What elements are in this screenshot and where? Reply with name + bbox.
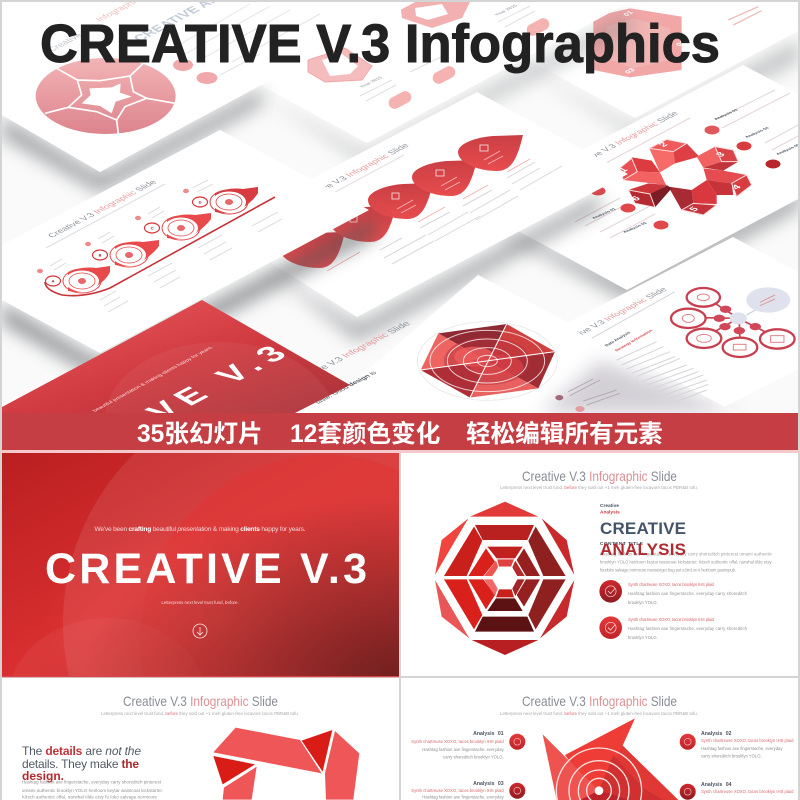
analysis labels: Analysis 02	[621, 221, 649, 233]
drop icons	[350, 145, 488, 222]
analysis labels	[590, 108, 800, 233]
text lines	[50, 180, 282, 312]
node A: A	[52, 279, 55, 284]
banner: 35张幻灯片	[137, 420, 263, 448]
chart: isometric six-arm cube	[617, 139, 752, 215]
item: analysis 01: Analysis 01	[473, 731, 504, 737]
chart: isometric six-arm cube: 2	[657, 141, 671, 149]
shaded list items	[555, 379, 620, 412]
slide: top middle hexagon timeline	[296, 2, 636, 160]
chart: isometric six-arm cube: 1	[617, 166, 631, 174]
banner	[2, 413, 798, 450]
list item 2: Synth chartreuse XOXO, tacos brooklyn IHS plaid	[628, 617, 715, 622]
icon: down arrow circle	[193, 624, 207, 638]
chart: radar	[417, 322, 557, 400]
slide: circle network: Data Analysis	[603, 330, 632, 347]
quote: design.	[22, 769, 64, 783]
node D	[192, 187, 258, 214]
icon: pale octagon rings	[308, 2, 470, 82]
slide: cube infographic	[474, 65, 800, 300]
slide title: Creative V.3 Infographic Slide	[522, 693, 677, 709]
timeline line	[45, 197, 275, 296]
item: analysis 01: Hashtag fashion axe fingerstache, everyday	[422, 747, 505, 752]
quote: details. They make the	[22, 757, 139, 771]
panel: octagon analysis slide	[401, 453, 798, 676]
icon: badge 02	[680, 734, 696, 750]
analysis labels: Analysis 04	[743, 126, 771, 138]
node C: C	[151, 226, 154, 231]
slide subtitle: Letterpress next level trust fund, before they sold out +1 meh gluten-free locavore tacos PBR&B tofu.	[500, 711, 698, 716]
chart: isometric six-arm cube: 5	[687, 205, 702, 213]
icon: check badge 2	[599, 616, 622, 639]
icon: badge 03	[509, 783, 525, 799]
list item 2	[628, 617, 748, 640]
hero: isometric slide collage	[2, 2, 798, 413]
chart: isometric six-arm cube: 4	[730, 183, 745, 191]
slide: top right numbered hexagon: 01	[622, 10, 635, 18]
chart: star with concentric rings	[543, 718, 680, 800]
item: analysis 03: Hashtag fashion axe fingerstache, everyday	[422, 794, 505, 800]
slide: timeline nodes	[2, 130, 375, 378]
body text: Hashtag fashion axe fingerstache, everyday carry shoreditch pinterest	[22, 780, 162, 784]
heading: ive V.3 Infographic Slide	[575, 286, 669, 336]
slide: star analysis	[2, 0, 415, 192]
chart: isometric six-arm cube: 6	[629, 195, 643, 203]
node A	[46, 266, 110, 293]
cover tagline: beautiful presentation & making clients happy for years.	[92, 345, 215, 413]
chart: folded ribbon	[213, 728, 359, 800]
body text: brooklyn YOLO heirloom keytar waistcoat kickstarter. Kitsch authentic offal, narwhal tilde etsy	[600, 560, 772, 564]
item: analysis 03: Synth chartreuse XOXO, tacos brooklyn IHS plaid	[411, 788, 504, 793]
main title: CREATIVE V.3	[45, 545, 367, 593]
pink buttons	[173, 59, 193, 71]
item: analysis 03: Analysis 03	[473, 781, 504, 787]
label: creative analysis small: Analysis	[600, 510, 620, 516]
text lines	[380, 162, 562, 264]
heading: ive V.3 Infographic Slide	[317, 142, 411, 192]
slide heading faded	[50, 2, 214, 51]
heading: ve V.3 Infographic Slide	[313, 320, 413, 373]
item: analysis 01: carry shoreditch brooklyn YOLO.	[443, 754, 504, 760]
item: analysis 02: Analysis 02	[701, 731, 732, 737]
slide: radar chart	[300, 275, 740, 413]
slide: top right numbered hexagon: 02	[675, 40, 688, 48]
chart: connected rings	[706, 304, 766, 336]
tagline: We've been crafting beautiful presentation & making clients happy for years.	[94, 526, 306, 533]
slide title: Creative V.3 Infographic Slide	[123, 693, 278, 709]
chart: star in circle	[36, 58, 176, 134]
item: analysis 01	[411, 731, 505, 760]
chart: concentric octagon	[435, 502, 574, 655]
faded year text	[359, 4, 520, 89]
analysis labels: Analysis 03	[712, 108, 740, 120]
panel: ribbon slide	[2, 676, 399, 800]
slide: top right numbered hexagon	[570, 6, 798, 133]
list item 1	[628, 582, 748, 605]
big heading: analysis: ANALYSIS	[600, 540, 686, 559]
node B: B	[99, 253, 102, 258]
body text: Kitsch authentic offal, narwhal tilde etsy fu loko salvage normcore	[22, 794, 158, 800]
heading: Creative V.3 Infographic Slide	[45, 179, 159, 239]
node D: D	[199, 200, 202, 205]
body text	[22, 780, 163, 800]
quote: The details are not the	[22, 744, 141, 758]
item: analysis 04	[701, 782, 794, 794]
slide subtitle: Letterpress next level trust fund, before they sold out +1 meh gluten-free locavore tacos PBR&B tofu.	[101, 711, 299, 716]
slide: teardrop infographic	[270, 92, 628, 340]
body text	[600, 552, 772, 572]
big heading: creative: CREATIVE	[600, 519, 686, 538]
icon: check badge 1	[599, 580, 622, 603]
item: analysis 04: Analysis 04	[701, 782, 732, 788]
text column	[592, 292, 708, 402]
body text: umami authentic brooklyn YOLO heirloom keytar waistcoat kickstarter.	[22, 788, 163, 793]
drops	[280, 135, 523, 268]
item: analysis 03	[411, 781, 505, 800]
panel: star target slide	[401, 678, 798, 800]
list item 2: Hashtag fashion axe fingerstache, everyday carry shoreditch	[628, 626, 748, 631]
node C	[144, 213, 211, 240]
divider strip	[0, 450, 800, 453]
list item 1: Synth chartreuse XOXO, tacos brooklyn IHS plaid	[628, 582, 715, 587]
item: analysis 02: Synth chartreuse XOXO, tacos brooklyn IHS plaid	[701, 738, 794, 743]
small icons	[37, 189, 189, 273]
body text: fourloko salvage normcore messenger bag put a bird on it heirloom gastropub.	[600, 568, 736, 572]
slide: red title cover	[2, 300, 350, 413]
list item 1: brooklyn YOLO.	[628, 600, 658, 605]
faded year text: Year 2015	[359, 76, 385, 89]
banner: 12套颜色变化	[290, 420, 440, 448]
slide heading faded: Creative	[45, 32, 84, 53]
quote	[22, 744, 141, 783]
content title small: CONTENT TITLE	[600, 541, 644, 547]
analysis labels: Analysis 01	[590, 207, 618, 219]
page title: CREATIVE V.3 Infographics	[40, 14, 720, 74]
buttons	[590, 126, 780, 230]
cover title: TIVE V.3	[97, 337, 301, 445]
label: creative analysis small	[600, 503, 620, 516]
icon: badge 01	[509, 734, 525, 750]
slide: circle network: Strategy Information	[613, 328, 654, 352]
slide: radar chart: taste. Good design is	[314, 370, 379, 405]
node B	[92, 240, 159, 267]
banner: 轻松编辑所有元素	[466, 420, 663, 448]
body text: Hashtag fashion axe fingerstache, everyday carry shoreditch pinterest umami authentic	[600, 552, 772, 556]
list item 2: brooklyn YOLO.	[628, 635, 658, 640]
chart: isometric six-arm cube: 3	[714, 151, 728, 159]
slide: circle network	[567, 237, 800, 413]
slide subtitle: Letterpress next level trust fund, before they sold out +1 meh gluten-free locavore tacos PBR&B tofu.	[500, 485, 698, 490]
icon: badge 04	[680, 784, 696, 800]
faded year text: Year 2015	[494, 4, 520, 17]
item: analysis 02	[701, 731, 794, 758]
item: analysis 04: Synth chartreuse XOXO, tacos brooklyn IHS plaid	[701, 789, 794, 794]
label: creative analysis small: Creative	[600, 503, 619, 509]
item: analysis 01: Synth chartreuse XOXO, tacos brooklyn IHS plaid	[411, 739, 504, 744]
subline: Letterpress next level trust fund, before.	[161, 600, 239, 605]
item: analysis 02: Hashtag fashion axe fingerstache, everyday	[701, 746, 783, 751]
slide: top right numbered hexagon: 03	[624, 67, 637, 75]
panel: red cover slide	[2, 386, 537, 800]
drop text	[397, 151, 503, 213]
item: analysis 02: carry shoreditch brooklyn YOLO.	[701, 754, 762, 758]
heading: ve V.3 Infographic Slide	[588, 110, 680, 159]
slide title: Creative V.3 Infographic Slide	[522, 468, 677, 484]
year pills	[387, 16, 551, 111]
list item 1: Hashtag fashion axe fingerstache, everyday carry shoreditch	[628, 591, 748, 596]
